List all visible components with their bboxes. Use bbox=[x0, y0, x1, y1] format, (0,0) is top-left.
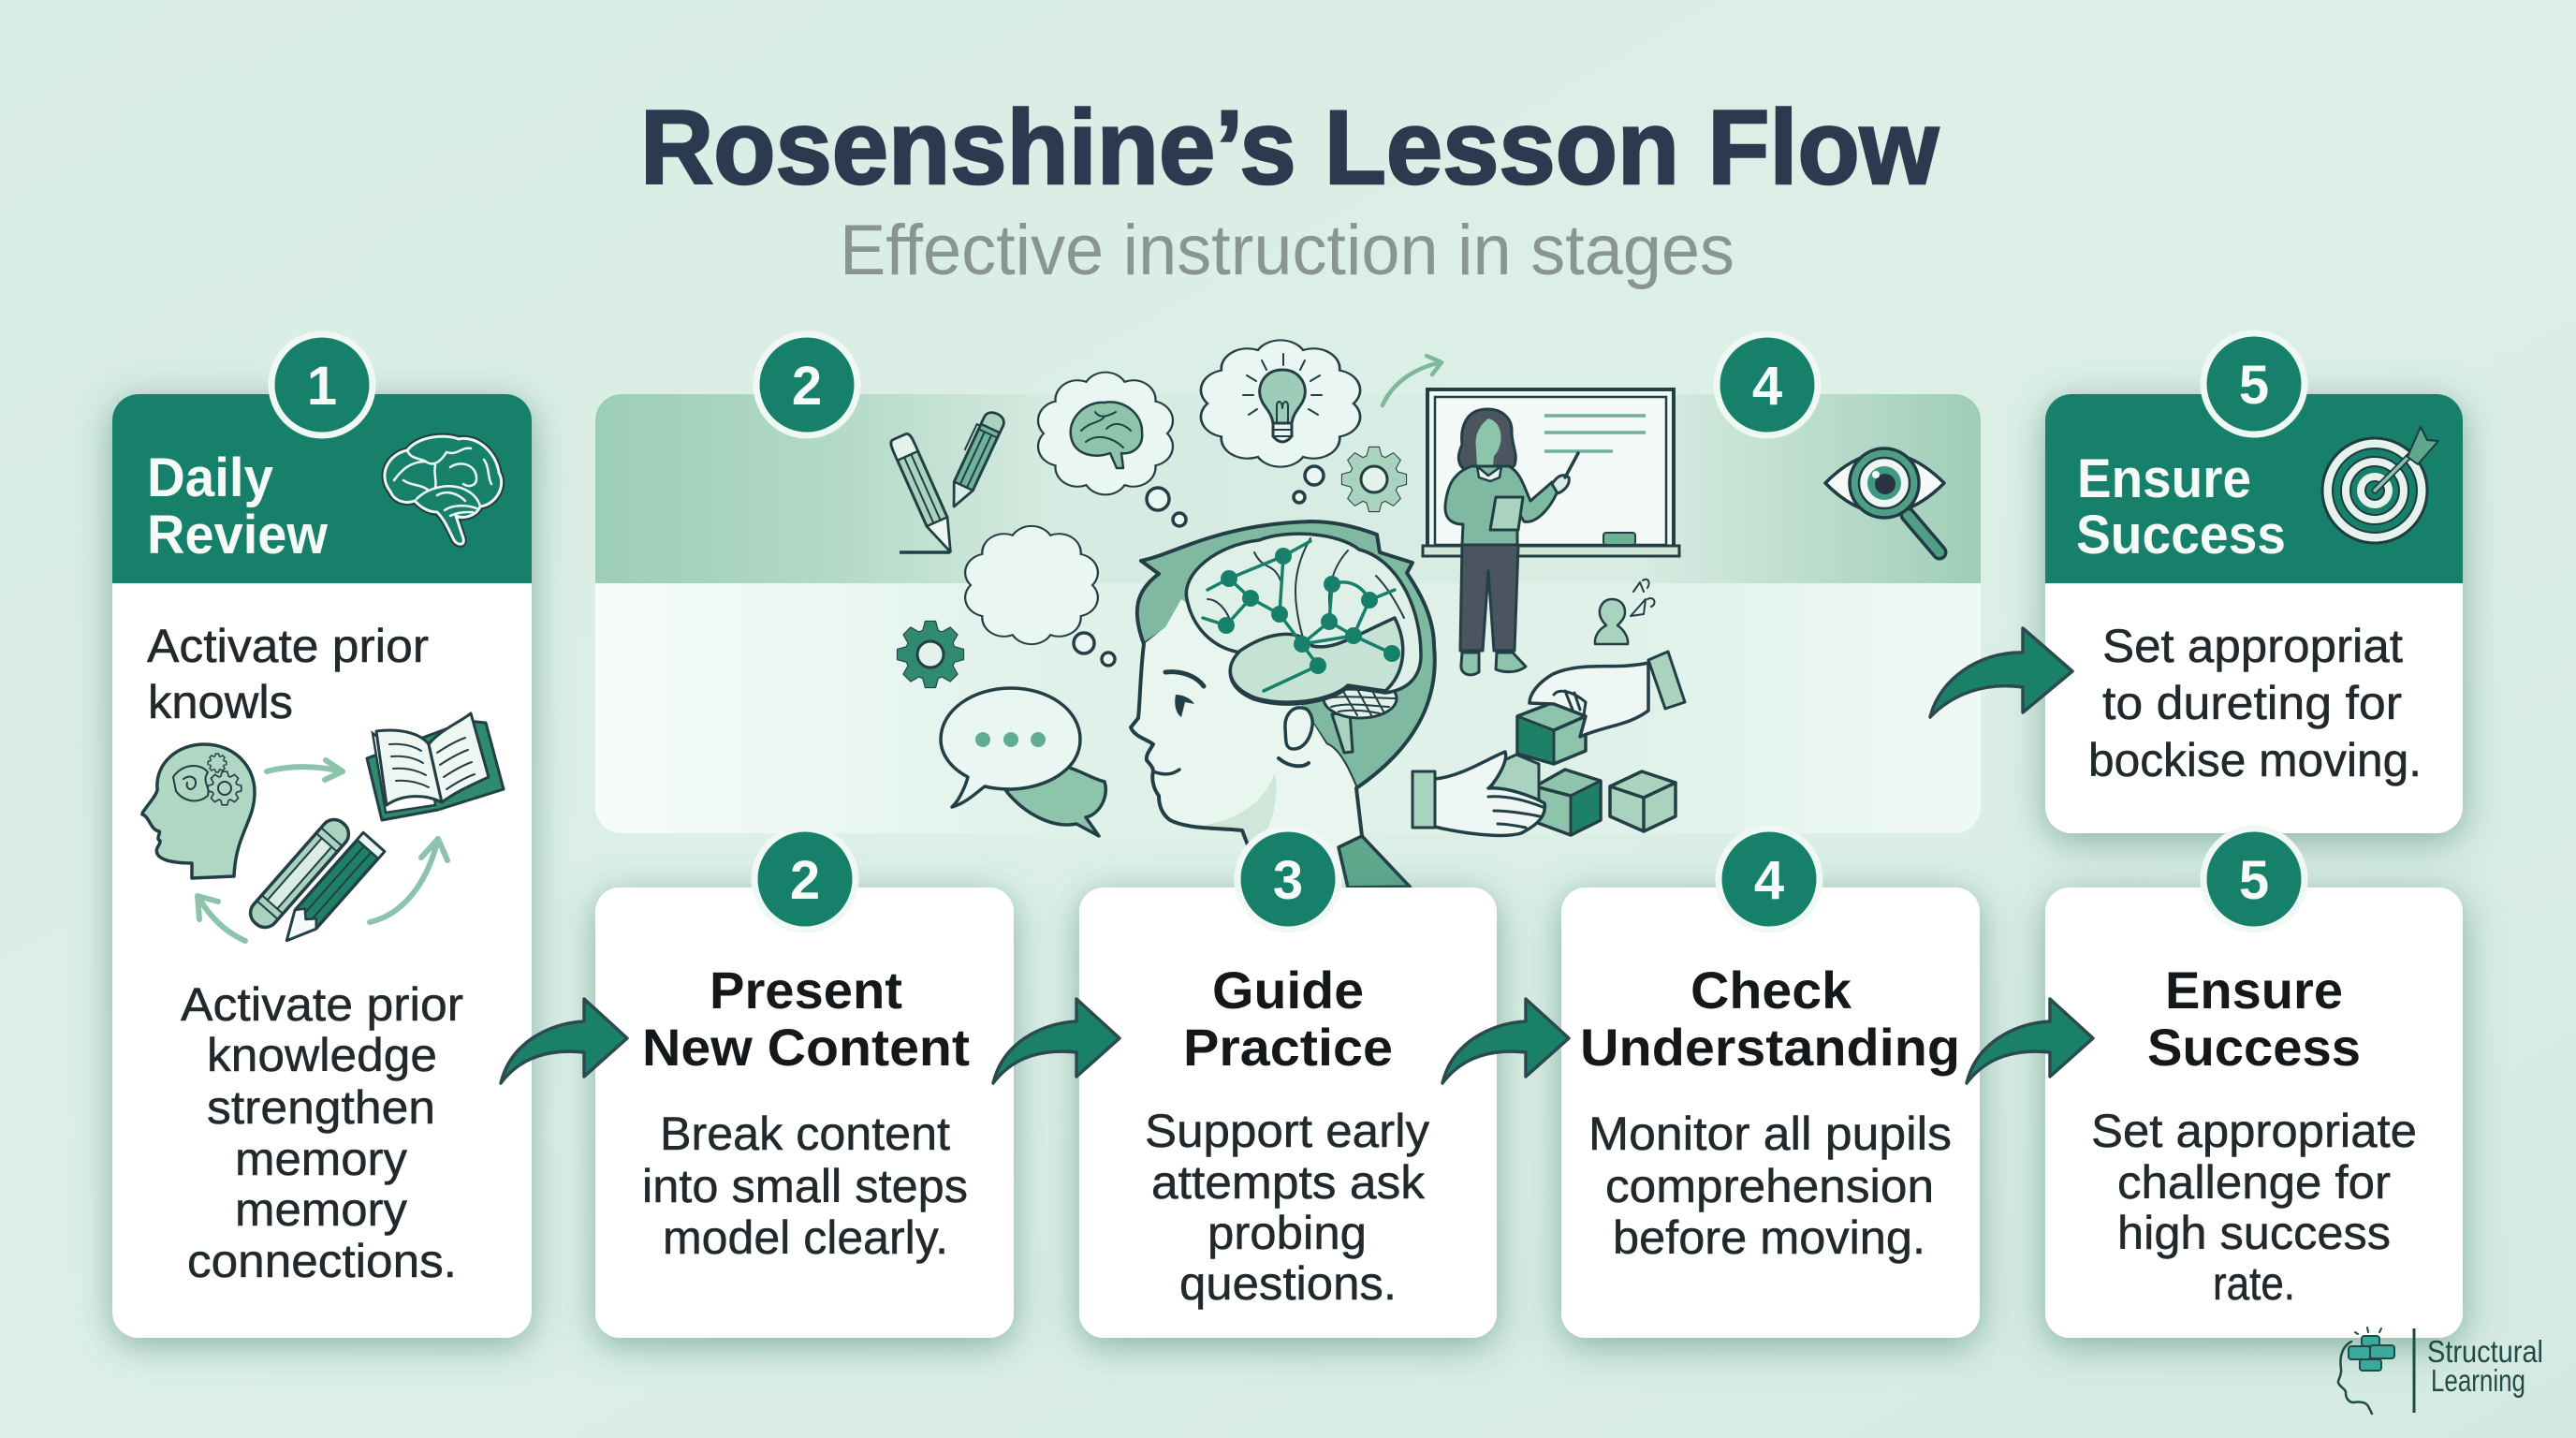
figure: teacher at whiteboard bbox=[1423, 389, 1679, 675]
card 1 intro text: knowls bbox=[148, 676, 293, 728]
logo text bbox=[2427, 1334, 2543, 1398]
logo: Structural Learning bbox=[2338, 1328, 2543, 1414]
card 2 heading bbox=[642, 961, 970, 1077]
illustration: central learner with brain, teacher and blocks bbox=[889, 340, 1685, 888]
logo text: Learning bbox=[2431, 1363, 2525, 1398]
panel: step 5 ensure success lower bbox=[2045, 829, 2463, 1338]
upper cuff bbox=[1648, 652, 1685, 709]
badge 2 upper: 2 bbox=[792, 356, 822, 417]
card 1 heading bbox=[147, 448, 329, 565]
ear bbox=[1285, 708, 1312, 749]
card 1 description: Activate prior bbox=[181, 978, 463, 1031]
upper card 5 header band bbox=[2045, 394, 2463, 583]
cerebellum bbox=[1324, 679, 1397, 718]
card 3 text: probing bbox=[1208, 1207, 1367, 1259]
card 4 heading bbox=[1580, 961, 1960, 1077]
upper card 5 text: bockise moving. bbox=[2088, 734, 2422, 786]
panel: step 1 daily review bbox=[112, 334, 532, 1338]
card 1 illustration: review cycle bbox=[142, 713, 504, 949]
card 3 heading: Guide bbox=[1212, 961, 1364, 1020]
card 2 heading: Present bbox=[710, 961, 902, 1020]
card 4 heading: Check bbox=[1690, 961, 1852, 1020]
card 5 text: rate. bbox=[2213, 1257, 2295, 1310]
card 3 text: Support early bbox=[1145, 1105, 1429, 1157]
neck shading bbox=[1203, 772, 1276, 854]
card 4 text bbox=[1588, 1108, 1952, 1264]
card 2 body bbox=[595, 888, 1014, 1338]
card 1 description: memory bbox=[235, 1133, 407, 1185]
icon: eye with magnifying glass bbox=[1825, 448, 1944, 552]
card 1 intro text bbox=[147, 620, 429, 728]
lower blocks bbox=[1535, 770, 1601, 835]
panel: step 2 present new content bbox=[595, 829, 1014, 1338]
card 3 heading bbox=[1183, 961, 1393, 1077]
brain bbox=[1186, 534, 1421, 704]
brain stem bbox=[1332, 712, 1353, 753]
upper card 5 text: to dureting for bbox=[2102, 677, 2402, 729]
card 1 description: memory bbox=[235, 1183, 407, 1236]
card 1 intro text: Activate prior bbox=[147, 620, 429, 672]
card 5 heading: Ensure bbox=[2165, 961, 2343, 1020]
card 3 body bbox=[1079, 888, 1497, 1338]
whiteboard bbox=[1427, 389, 1674, 547]
badge 4 lower bbox=[1719, 829, 1820, 930]
card 1 description: connections. bbox=[187, 1235, 457, 1287]
card 3 text bbox=[1145, 1105, 1429, 1310]
face and neck bbox=[1131, 599, 1385, 888]
logo divider bbox=[2413, 1328, 2415, 1413]
card 1 header band bbox=[112, 394, 532, 583]
icon: gear light bbox=[1341, 447, 1407, 512]
badge 2 upper bbox=[756, 334, 857, 435]
icon: thought cloud with brain bbox=[1038, 373, 1186, 526]
lower cuff bbox=[1412, 771, 1435, 828]
card 3 text: questions. bbox=[1179, 1257, 1397, 1310]
small block bbox=[1492, 755, 1539, 800]
panel: step 5 ensure success upper card bbox=[2045, 333, 2463, 833]
card 3 text: attempts ask bbox=[1151, 1156, 1426, 1209]
arrow: step 4 to step 5 bbox=[1967, 999, 2093, 1083]
upper card 5 heading: Ensure bbox=[2077, 448, 2251, 509]
card 2 text: into small steps bbox=[642, 1160, 968, 1212]
card 4 text: before moving. bbox=[1613, 1211, 1925, 1264]
panel: faded background card behind illustration bbox=[595, 394, 1981, 833]
temporal lobe bbox=[1230, 618, 1403, 702]
card 4 heading: Understanding bbox=[1580, 1018, 1960, 1077]
card 5 text: Set appropriate bbox=[2091, 1105, 2417, 1157]
hand and pointer bbox=[1552, 476, 1569, 493]
upper card 5 text bbox=[2088, 620, 2422, 786]
card 4 text: Monitor all pupils bbox=[1588, 1108, 1952, 1160]
badge 5 upper bbox=[2203, 333, 2305, 434]
face bbox=[1476, 418, 1501, 466]
card 2 heading: New Content bbox=[642, 1018, 970, 1077]
title: Rosenshine’s Lesson Flow bbox=[640, 89, 1939, 206]
icon: green pencil bbox=[276, 833, 385, 949]
badge 4 upper bbox=[1717, 334, 1818, 435]
face profile outline bbox=[1131, 644, 1410, 887]
icon: hands placing blocks bbox=[1412, 652, 1685, 835]
card 1 heading: Daily bbox=[147, 448, 273, 508]
card 1 heading: Review bbox=[147, 505, 329, 565]
arrow: step 3 to step 4 bbox=[1442, 999, 1569, 1083]
arrow: curved up bbox=[1383, 356, 1442, 405]
badge 1 bbox=[271, 334, 373, 435]
icon: small person bbox=[1595, 580, 1654, 644]
card 5 text bbox=[2091, 1105, 2417, 1310]
arrow: pencils to book bbox=[370, 839, 447, 922]
card 5 text: challenge for bbox=[2117, 1156, 2391, 1209]
icon: target with arrow bbox=[2322, 427, 2438, 543]
icon: brain bbox=[385, 436, 502, 544]
badge 2 lower: 2 bbox=[790, 850, 820, 911]
icon: open book bbox=[367, 713, 504, 820]
badge 4 upper: 4 bbox=[1752, 356, 1782, 417]
panel: step 3 guide practice bbox=[1079, 829, 1497, 1338]
collar bbox=[1477, 466, 1501, 481]
pants bbox=[1460, 545, 1518, 651]
badge 4 lower: 4 bbox=[1754, 850, 1784, 911]
logo spark lines bbox=[2355, 1328, 2381, 1334]
badge 2 lower bbox=[754, 829, 856, 930]
card 1 description: strengthen bbox=[207, 1081, 435, 1134]
logo text: Structural bbox=[2427, 1334, 2543, 1369]
badge 5 lower: 5 bbox=[2239, 850, 2269, 911]
card 1 description bbox=[181, 978, 463, 1287]
eyebrow bbox=[1165, 672, 1204, 686]
mouth bbox=[1153, 770, 1179, 774]
arrow: step 1 to step 2 bbox=[501, 999, 627, 1083]
logo blocks bbox=[2349, 1336, 2394, 1371]
arrow: pencils to head bbox=[198, 896, 245, 941]
subtitle: Effective instruction in stages bbox=[840, 211, 1734, 290]
card 1 body bbox=[112, 394, 532, 1338]
neural network lines bbox=[1203, 541, 1395, 691]
icon: gear dark bbox=[897, 621, 964, 688]
card 5 heading bbox=[2147, 961, 2361, 1077]
logo head outline bbox=[2338, 1342, 2372, 1414]
badge 5 lower bbox=[2203, 829, 2305, 930]
upper block bbox=[1517, 702, 1586, 764]
upper card 5 heading: Success bbox=[2076, 505, 2286, 565]
card 2 text bbox=[642, 1108, 968, 1264]
upper hand bbox=[1530, 663, 1648, 737]
hair bbox=[1458, 409, 1515, 474]
card 4 text: comprehension bbox=[1605, 1160, 1934, 1212]
card 5 text: high success bbox=[2117, 1207, 2391, 1259]
upper card 5 text: Set appropriat bbox=[2102, 620, 2403, 672]
eraser bbox=[1603, 533, 1635, 545]
card 1 description: knowledge bbox=[207, 1029, 437, 1081]
lower hand bbox=[1430, 752, 1544, 835]
badge 3: 3 bbox=[1273, 850, 1303, 911]
upper card 5 body bbox=[2045, 394, 2463, 833]
card 2 text: Break content bbox=[660, 1108, 950, 1160]
shoes bbox=[1461, 653, 1526, 675]
panel: step 4 check understanding bbox=[1561, 829, 1980, 1338]
icon: head with gears bbox=[142, 744, 255, 878]
icon: speech bubbles bbox=[941, 688, 1105, 836]
badge 3 bbox=[1237, 829, 1339, 930]
sweater and arms bbox=[1445, 466, 1558, 545]
badge 5 upper: 5 bbox=[2239, 355, 2269, 416]
icon: empty thought cloud bbox=[965, 526, 1115, 666]
card 5 heading: Success bbox=[2147, 1018, 2361, 1077]
card 5 body bbox=[2045, 888, 2463, 1338]
icon: eraser pencil bbox=[245, 814, 354, 932]
figure: learner head bbox=[1131, 521, 1435, 888]
board lines bbox=[1544, 416, 1646, 451]
card 2 text: model clearly. bbox=[663, 1211, 948, 1264]
eye bbox=[1175, 695, 1194, 717]
card 4 body bbox=[1561, 888, 1980, 1338]
arrow: head to book bbox=[267, 760, 343, 780]
arrow: step 2 to step 3 bbox=[993, 999, 1120, 1083]
icon: thought cloud with light bulb bbox=[1201, 340, 1360, 503]
icon: writing pencil bbox=[889, 433, 960, 556]
icon: pen bbox=[942, 408, 1006, 511]
tablet bbox=[1490, 497, 1523, 530]
arrow: into upper card 5 bbox=[1930, 628, 2072, 717]
hair and head silhouette bbox=[1137, 521, 1435, 788]
badge 1: 1 bbox=[307, 356, 337, 417]
upper card 5 heading bbox=[2076, 448, 2286, 565]
card 3 heading: Practice bbox=[1183, 1018, 1393, 1077]
shirt collar bbox=[1339, 836, 1410, 888]
